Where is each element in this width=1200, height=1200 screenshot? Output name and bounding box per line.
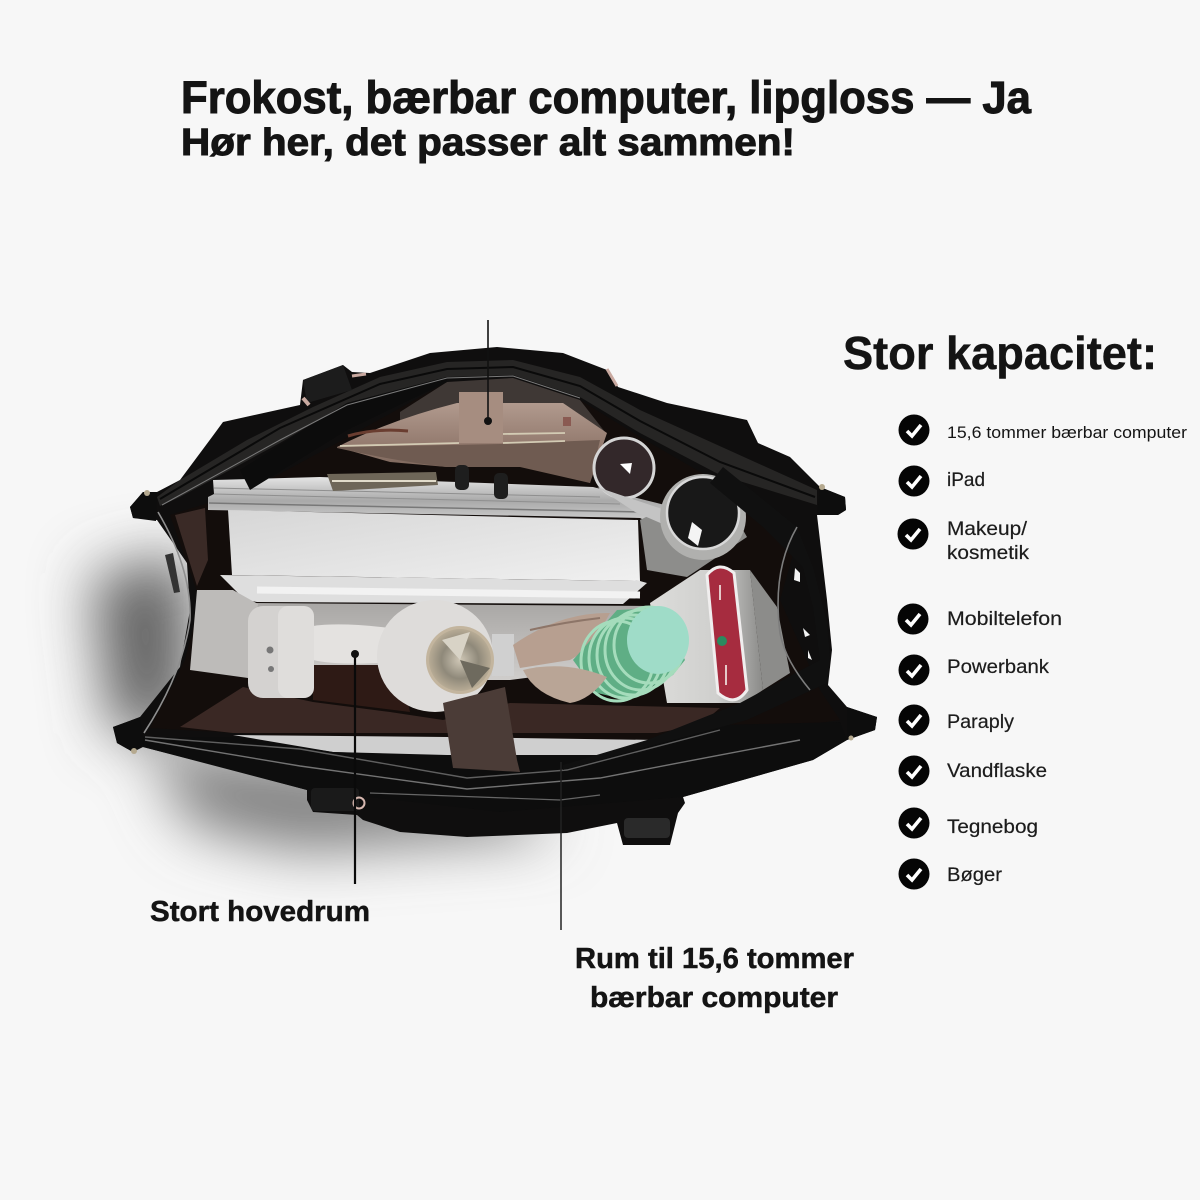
corner tabs <box>113 487 877 752</box>
power bank side wall <box>750 570 790 690</box>
brown inner pocket <box>180 687 720 733</box>
laptop in padded sleeve <box>233 735 657 755</box>
label: laptop compartment: bærbar computer <box>590 982 838 1014</box>
right side holes <box>794 568 812 660</box>
title <box>181 72 1032 164</box>
laptop edge detail <box>257 590 640 595</box>
item: laptop: 15,6 tommer bærbar computer <box>947 423 1187 442</box>
water bottle <box>594 438 747 577</box>
item: iPad <box>898 466 985 496</box>
metal clip <box>327 472 438 491</box>
lining highlight <box>175 508 208 586</box>
front rim <box>143 722 847 812</box>
item: umbrella <box>898 704 1014 736</box>
item: iPad: iPad <box>947 469 985 491</box>
handle anchors <box>303 365 670 838</box>
item: makeup: kosmetik <box>947 542 1029 564</box>
title: Frokost, bærbar computer, lipgloss — Ja <box>181 72 1032 123</box>
illustration: open bag with contents <box>113 347 877 845</box>
lower compartment wall <box>247 603 650 680</box>
left charger block <box>190 590 258 678</box>
bag body silhouette <box>113 347 877 845</box>
right strap <box>563 467 830 770</box>
brown strap <box>443 687 520 772</box>
second sponge <box>523 666 607 703</box>
umbrella pouch <box>337 392 607 483</box>
item: books <box>898 858 1003 890</box>
green makeup capsule <box>573 606 689 701</box>
item: phone: Mobiltelefon <box>947 608 1062 630</box>
label: main compartment: Stort hovedrum <box>150 896 370 928</box>
title: Hør her, det passer alt sammen! <box>181 122 795 164</box>
corner studs <box>131 484 854 754</box>
item: makeup: Makeup/ <box>947 518 1028 540</box>
item: laptop <box>898 414 1187 446</box>
callout line: top pocket <box>484 320 492 425</box>
item: water bottle <box>898 756 1047 786</box>
makeup sponges <box>513 613 610 668</box>
item: powerbank: Powerbank <box>947 656 1049 678</box>
white book <box>228 510 640 581</box>
pen tips <box>455 465 508 499</box>
capacity checklist <box>898 414 1187 890</box>
left side highlight <box>144 512 190 733</box>
item: phone <box>898 604 1062 634</box>
item: makeup <box>898 518 1029 564</box>
dark pocket behind headphones <box>313 665 410 712</box>
laptop shelf <box>220 575 647 604</box>
item: books: Bøger <box>947 864 1003 886</box>
right side frame highlights <box>778 527 810 690</box>
item: powerbank <box>898 654 1049 686</box>
heading: capacity: Stor kapacitet: <box>843 327 1157 379</box>
callout line: main compartment <box>351 650 359 884</box>
item: umbrella: Paraply <box>947 711 1014 733</box>
back lining above pouch <box>400 378 605 432</box>
item: wallet: Tegnebog <box>947 816 1038 838</box>
label: laptop compartment: Rum til 15,6 tommer <box>575 943 854 975</box>
bag interior lining <box>150 378 840 755</box>
callout line: laptop compartment <box>560 762 562 930</box>
side pocket snap <box>165 553 180 593</box>
headphones <box>248 600 514 712</box>
label: laptop compartment <box>575 943 854 1014</box>
bag shadow <box>92 555 560 850</box>
top laptop <box>208 477 665 530</box>
top rim with zip <box>157 360 817 506</box>
power bank <box>650 567 763 703</box>
item: wallet <box>898 808 1038 838</box>
item: water bottle: Vandflaske <box>947 760 1047 782</box>
